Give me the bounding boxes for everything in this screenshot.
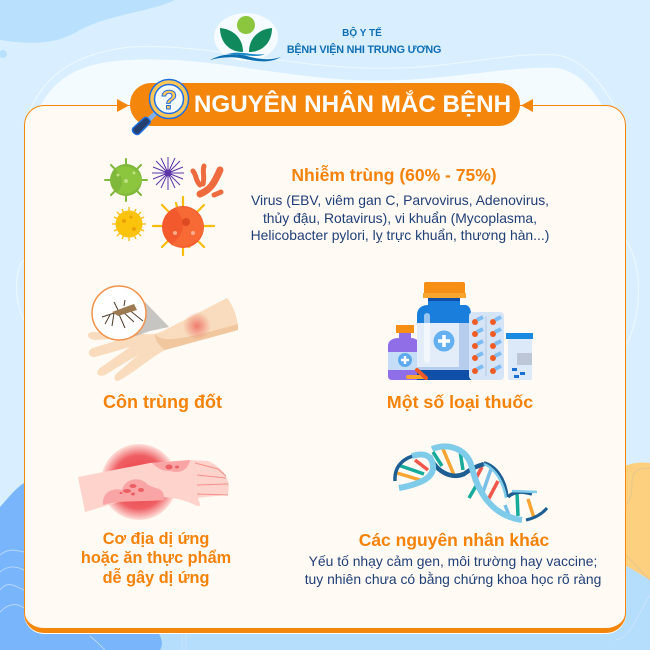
text: other causes description: Yếu tố nhạy cảm gen, môi trường hay vaccine;: [309, 553, 597, 569]
logo text: BỘ Y TẾ: [342, 28, 382, 39]
icon: magnifier with question mark: [132, 78, 190, 136]
text: BỆNH VIỆN NHI TRUNG ƯƠNG: [287, 44, 441, 56]
main panel: [24, 105, 626, 633]
text: infection description: Helicobacter pylori, lỵ trực khuẩn, thương hàn...): [251, 227, 549, 243]
heading: insect bite: Côn trùng đốt: [103, 392, 222, 412]
title text: NGUYÊN NHÂN MẮC BỆNH: [194, 91, 511, 118]
heading: other causes: Các nguyên nhân khác: [359, 530, 549, 550]
heading: allergy: [81, 530, 231, 587]
icon: magnifier with question mark: ?: [161, 85, 177, 115]
heading: allergy: Cơ địa dị ứng: [103, 530, 209, 548]
title banner: [130, 83, 520, 126]
text: infection description: [251, 192, 549, 243]
icon: viruses and bacteria: [104, 157, 224, 256]
text: infection description: Virus (EBV, viêm gan C, Parvovirus, Adenovirus,: [251, 192, 549, 208]
heading: allergy: dễ gây dị ứng: [103, 569, 209, 587]
icon: DNA helix: [393, 443, 548, 523]
text: other causes description: [304, 553, 601, 587]
text: other causes description: tuy nhiên chưa có bằng chứng khoa học rõ ràng: [305, 570, 601, 586]
icon: medicine bottles: [388, 282, 533, 380]
icon: insect bite on arm: [88, 285, 238, 381]
title arrow left: [117, 99, 128, 112]
heading: infection: Nhiễm trùng (60% - 75%): [291, 165, 497, 185]
icon: allergic arm: [78, 444, 229, 520]
title arrow right: [522, 99, 533, 112]
logo: hospital emblem: [210, 13, 281, 62]
heading: medicines: Một số loại thuốc: [387, 392, 533, 412]
text: infection description: thủy đậu, Rotavirus), vi khuẩn (Mycoplasma,: [263, 210, 537, 226]
heading: allergy: hoặc ăn thực phẩm: [81, 549, 231, 567]
